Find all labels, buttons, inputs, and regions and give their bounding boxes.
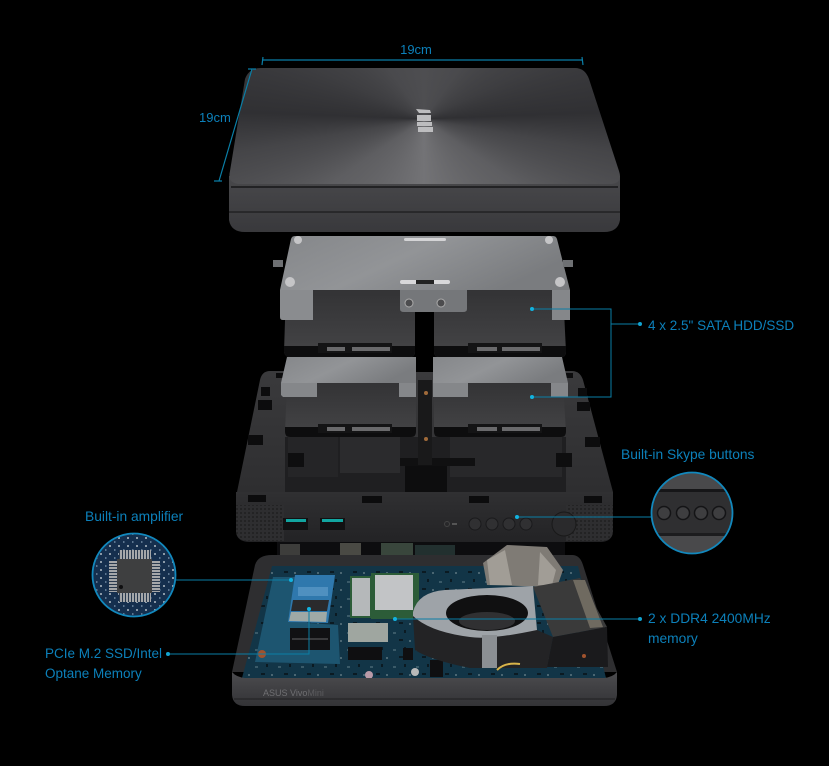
- heat pipe and fins: [533, 578, 607, 637]
- inset: amplifier chip magnified: [92, 533, 176, 617]
- lower right drive: [433, 357, 568, 437]
- callout: SATA drives: 4 x 2.5" SATA HDD/SSD: [648, 318, 794, 333]
- tray notches: [248, 373, 600, 447]
- callout: amplifier: [85, 509, 293, 617]
- USB ports: [283, 518, 345, 530]
- dimension: depth: 19cm: [199, 110, 231, 125]
- callout: SATA drives: [530, 307, 794, 399]
- callout: DDR4 memory: [393, 611, 771, 646]
- callout: amplifier: Built-in amplifier: [85, 509, 184, 524]
- wifi card: [348, 623, 388, 642]
- M.2 carrier board: [255, 577, 340, 664]
- bottom components: [365, 668, 419, 679]
- front lip with branding: [232, 672, 617, 706]
- front lip with branding: ASUS VivoMini: [263, 688, 324, 698]
- ASUS logo on lid: [416, 109, 433, 132]
- cooling fan: [413, 586, 553, 668]
- SATA connectors: [348, 647, 443, 677]
- callout: Skype buttons: Built-in Skype buttons: [621, 447, 755, 462]
- callout: PCIe M.2 SSD: Optane Memory: [45, 666, 142, 681]
- dimension: width: [262, 42, 583, 65]
- dimension: width: 19cm: [400, 42, 432, 57]
- callout: PCIe M.2 SSD: PCIe M.2 SSD/Intel: [45, 646, 162, 661]
- base tray with drive bays: [236, 371, 613, 542]
- top lid of the device: [225, 65, 625, 232]
- fan cable: [497, 664, 520, 670]
- cage metal plate: [280, 236, 570, 290]
- upper drive cage with two drives: [273, 236, 573, 372]
- lower left drive: [281, 357, 416, 437]
- upper left drive: [284, 290, 415, 357]
- bottom tray shell: [232, 555, 617, 672]
- lid radial metal top face: [225, 65, 625, 190]
- status LED and front buttons: [444, 512, 576, 536]
- memory modules: [350, 573, 419, 619]
- lower drives in base tray: [281, 357, 568, 437]
- callout: PCIe M.2 SSD: [45, 607, 311, 681]
- front panel with ports and buttons: [236, 492, 613, 542]
- callout: Skype buttons: [515, 447, 755, 555]
- cage metal flaps: [280, 290, 570, 320]
- M.2 SSD card: [288, 575, 335, 623]
- upper right drive: [434, 290, 566, 357]
- lid side walls: [229, 176, 620, 232]
- motherboard: [242, 566, 606, 678]
- CPU heatsink: [483, 545, 563, 587]
- callout: DDR4 memory: 2 x DDR4 2400MHz: [648, 611, 771, 626]
- inset: Skype buttons magnified: [650, 470, 735, 555]
- callout: DDR4 memory: memory: [648, 631, 698, 646]
- bottom unit with motherboard: [232, 542, 617, 706]
- dimension: depth: [199, 69, 256, 181]
